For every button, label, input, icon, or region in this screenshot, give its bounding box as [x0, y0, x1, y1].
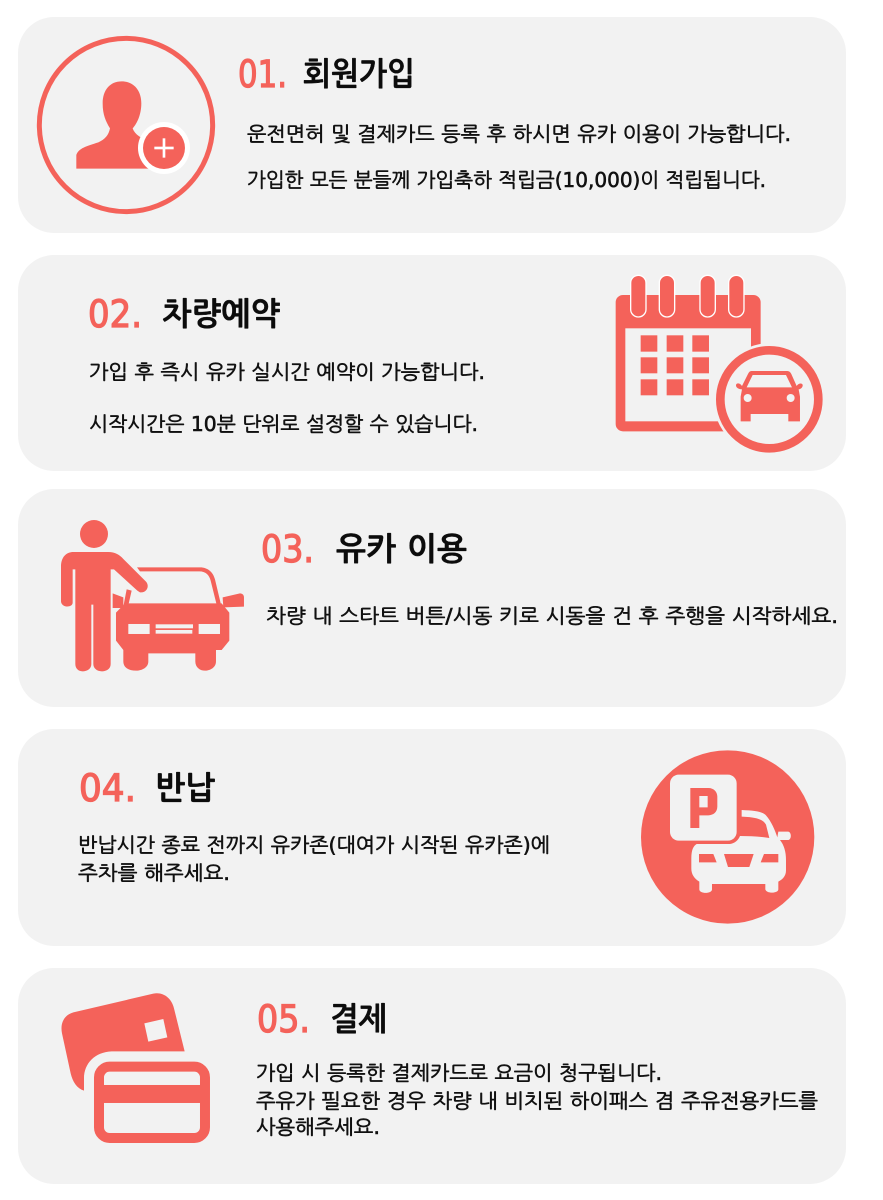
text block: 01 description: 운전면허 및 결제카드 등록 후 하시면 유카 이용이 가능합니다. — [247, 122, 791, 146]
text block: 05 description — [256, 1061, 818, 1139]
icon: user with plus in circle — [39, 38, 213, 212]
icon: person beside car — [61, 520, 244, 671]
panel: 02 reservation — [18, 255, 846, 471]
icon: calendar with car — [616, 275, 825, 455]
text block: 04 description: 주차를 해주세요. — [78, 861, 230, 885]
heading: 03: 03. — [261, 528, 314, 571]
text block: 01 description: 가입한 모든 분들께 가입축하 적립금(10,000)이 적립됩니다. — [247, 168, 766, 192]
heading: 01: 01. — [238, 53, 287, 96]
heading: 05: 05. — [257, 998, 310, 1041]
text block: 02 description: 가입 후 즉시 유카 실시간 예약이 가능합니다. — [89, 360, 485, 384]
text block: 01 description — [247, 122, 791, 192]
icon: parking and car in circle — [641, 750, 814, 924]
heading: 04 — [79, 767, 215, 810]
panel: 01 sign up — [18, 17, 846, 233]
heading: 05: 결제 — [330, 1000, 387, 1038]
panel: 04 return — [18, 729, 846, 946]
text block: 02 description — [89, 360, 485, 436]
heading: 02: 차량예약 — [162, 295, 280, 333]
heading: 02: 02. — [88, 293, 142, 336]
heading: 05 — [257, 998, 387, 1041]
heading: 03: 유카 이용 — [336, 530, 467, 568]
heading: 04: 반납 — [155, 769, 215, 807]
text block: 04 description: 반납시간 종료 전까지 유카존(대여가 시작된 유카존)에 — [78, 833, 550, 857]
icon: credit cards — [61, 993, 205, 1138]
text block: 05 description: 사용해주세요. — [256, 1115, 380, 1139]
text block: 04 description — [78, 833, 550, 885]
heading: 01 — [238, 53, 415, 96]
heading: 01: 회원가입 — [303, 55, 415, 93]
text block: 05 description: 주유가 필요한 경우 차량 내 비치된 하이패스 겸 주유전용카드를 — [256, 1089, 818, 1113]
text block: 02 description: 시작시간은 10분 단위로 설정할 수 있습니다. — [89, 412, 478, 436]
panel: 05 payment — [18, 968, 846, 1184]
heading: 03 — [261, 528, 467, 571]
panel: 03 use — [18, 489, 846, 707]
text block: 05 description: 가입 시 등록한 결제카드로 요금이 청구됩니다. — [256, 1061, 662, 1085]
heading: 02 — [88, 293, 280, 336]
text block: 03 description: 차량 내 스타트 버튼/시동 키로 시동을 건 후 주행을 시작하세요. — [266, 604, 838, 628]
heading: 04: 04. — [79, 767, 136, 810]
